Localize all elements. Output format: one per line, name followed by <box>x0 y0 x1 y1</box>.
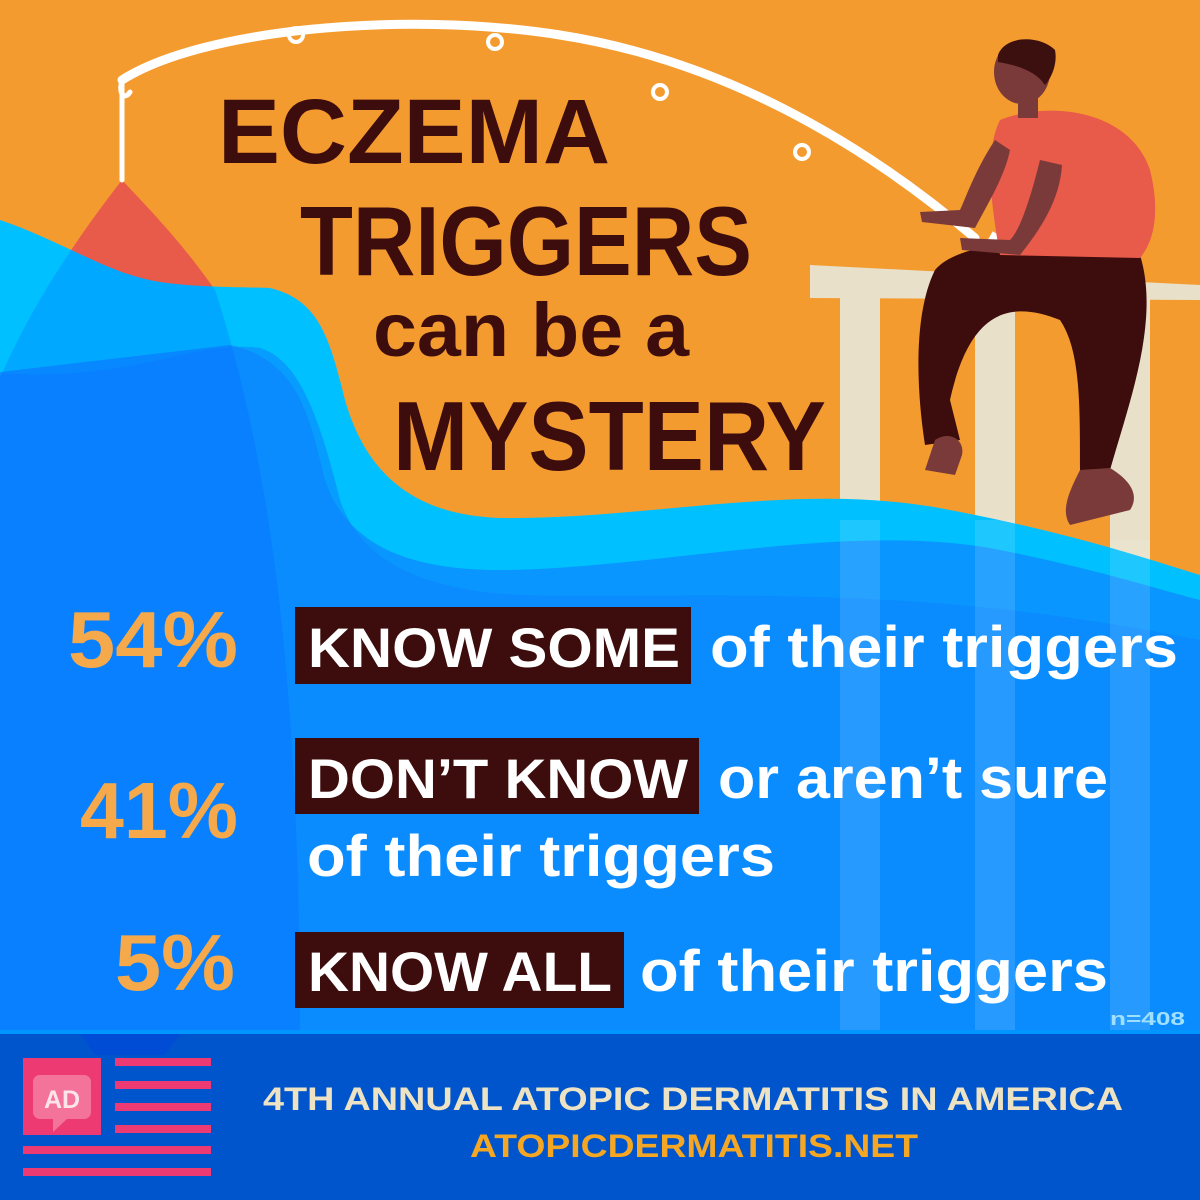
footer text: 4TH ANNUAL ATOPIC DERMATITIS IN AMERICA <box>263 1081 1123 1117</box>
stat 1: 54%: of their triggers <box>710 615 1178 680</box>
fish overlay underwater <box>0 250 300 1030</box>
pier <box>810 265 1200 1033</box>
title: ECZEMA <box>218 81 610 183</box>
stat 3: 5%: KNOW ALL <box>308 940 612 1003</box>
pier under water <box>840 520 1150 1033</box>
title <box>218 81 826 491</box>
stat 1: 54%: 54% <box>68 595 238 684</box>
fisherman <box>918 39 1155 525</box>
stat 1: 54% <box>68 595 1178 684</box>
sample size note: n=408 <box>1110 1009 1185 1029</box>
stat 2: 41%: or aren’t sure <box>718 746 1108 811</box>
stat 2: 41%: 41% <box>80 766 238 855</box>
stat 3: 5% <box>115 918 1108 1008</box>
fish (above water part) <box>0 180 300 1060</box>
stat 1: 54%: KNOW SOME <box>308 616 680 679</box>
stat 2: 41%: of their triggers <box>307 824 775 889</box>
footer <box>0 1030 1200 1200</box>
logo: AD flag <box>23 1058 211 1176</box>
footer: ATOPICDERMATITIS.NET <box>470 1128 919 1164</box>
title: MYSTERY <box>393 381 826 491</box>
stat 3: 5%: 5% <box>115 918 235 1007</box>
logo: AD flag: AD <box>44 1086 80 1114</box>
fishing rod and line <box>121 24 975 238</box>
title: TRIGGERS <box>300 186 752 296</box>
stat 3: 5%: of their triggers <box>640 939 1108 1004</box>
stat 2: 41%: DON’T KNOW <box>308 747 688 810</box>
title: can be a <box>373 288 690 373</box>
stat 2: 41% <box>80 738 1108 889</box>
